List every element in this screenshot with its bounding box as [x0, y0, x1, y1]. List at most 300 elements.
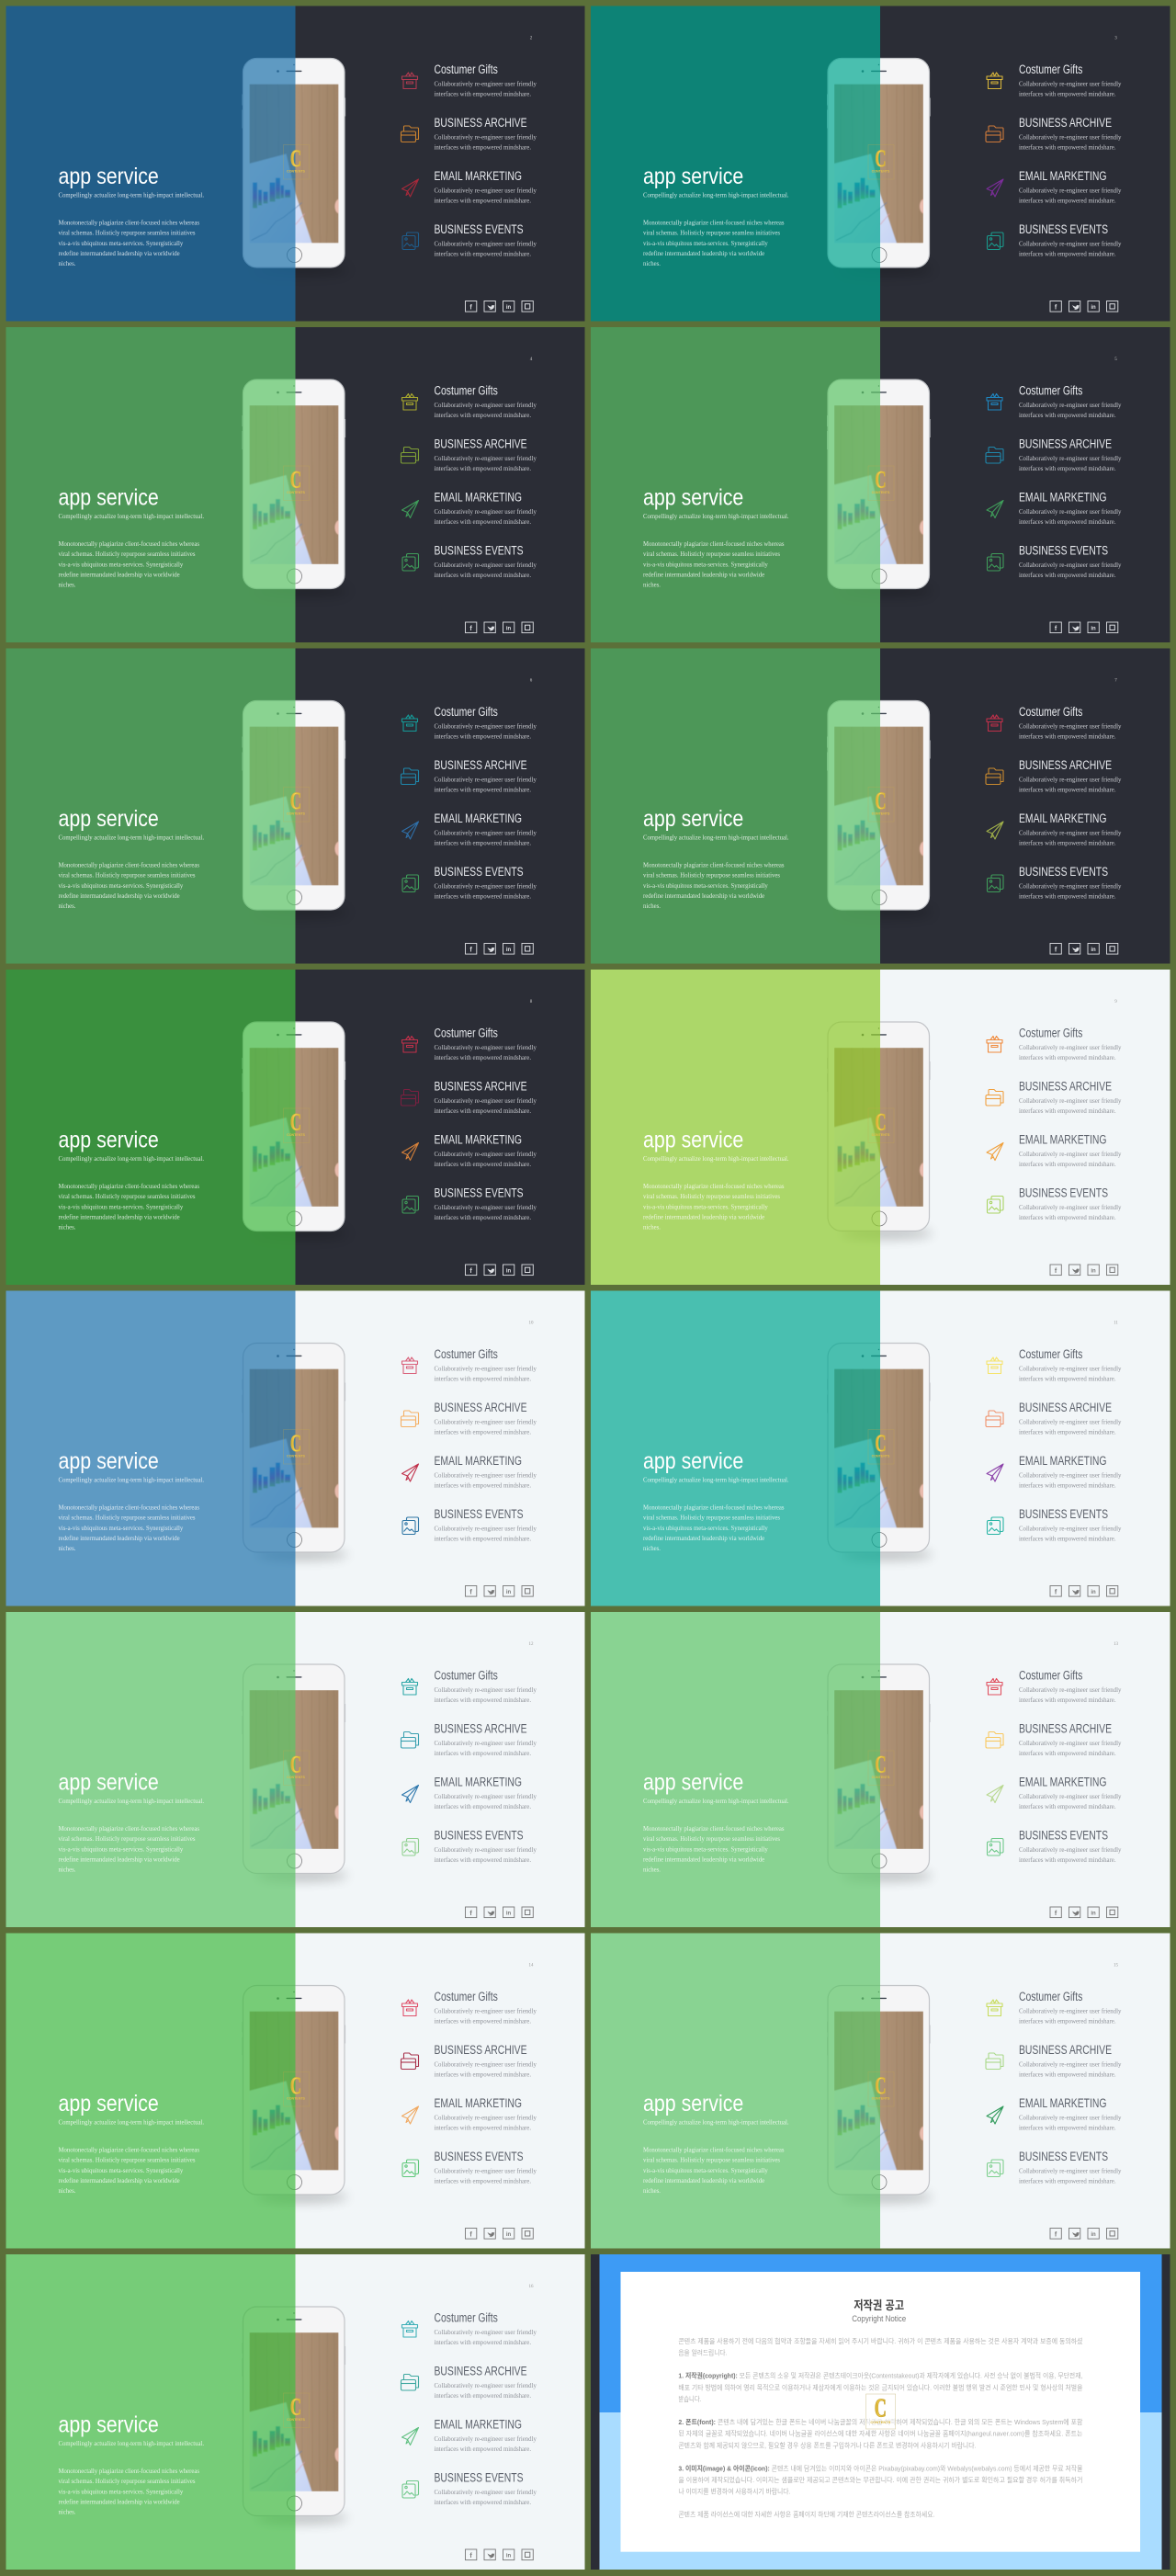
paragraph: niches. — [643, 1545, 661, 1552]
paragraph: redefine intermandated leadership via worldwide — [58, 571, 180, 579]
panel: slide 8 — [6, 970, 584, 1285]
feature: gifts: Costumer Gifts — [1019, 383, 1082, 398]
logo — [283, 466, 309, 500]
page number: 12 — [529, 1642, 534, 1647]
feature: events: BUSINESS EVENTS — [1019, 1828, 1108, 1843]
page number: 3 — [1114, 37, 1117, 40]
phone mockup — [827, 380, 933, 596]
paragraph: vis-a-vis ubiquitous meta-services. Synergistically — [58, 2488, 184, 2495]
logo — [283, 1429, 309, 1464]
feature: archive — [986, 2043, 1122, 2079]
feature: gifts: Collaboratively re-engineer user friendly — [435, 1044, 537, 1051]
blue band top — [599, 2254, 1161, 2412]
feature: email: Collaboratively re-engineer user friendly — [435, 508, 537, 516]
feature: events — [987, 1507, 1122, 1543]
feature: gifts: Costumer Gifts — [1019, 705, 1082, 719]
feature: archive: Collaboratively re-engineer user friendly — [435, 133, 537, 142]
feature: archive: interfaces with empowered mindshare. — [1019, 2071, 1116, 2079]
feature: email: Collaboratively re-engineer user friendly — [435, 187, 537, 195]
feature: gifts: Collaboratively re-engineer user friendly — [1019, 402, 1122, 409]
panel: slide 11 — [591, 1290, 1170, 1606]
phone mockup — [827, 700, 933, 917]
paragraph: vis-a-vis ubiquitous meta-services. Synergistically — [58, 2166, 184, 2174]
heading: app service — [643, 1447, 743, 1473]
paragraph: niches. — [58, 1866, 76, 1874]
subtitle: Compellingly actualize long-term high-impact intellectual. — [643, 1155, 789, 1163]
feature: gifts: interfaces with empowered mindshare. — [1019, 1697, 1116, 1704]
paragraph — [59, 1183, 199, 1231]
feature: email: interfaces with empowered mindshare. — [1019, 1161, 1116, 1168]
heading: app service — [58, 163, 159, 188]
feature: email: interfaces with empowered mindshare. — [1019, 518, 1116, 526]
feature: email: interfaces with empowered mindshare. — [1019, 197, 1116, 205]
feature: events: Collaboratively re-engineer user friendly — [435, 1525, 537, 1533]
social icons — [465, 1586, 533, 1596]
feature: archive — [401, 758, 537, 794]
colour overlay — [591, 1612, 880, 1927]
heading: app service — [58, 1769, 159, 1795]
feature: gifts: interfaces with empowered mindshare. — [435, 1375, 531, 1383]
colour overlay — [6, 649, 296, 963]
feature: archive — [986, 758, 1122, 794]
feature: gifts — [402, 62, 537, 98]
paragraph: redefine intermandated leadership via worldwide — [643, 1535, 764, 1542]
feature: archive: BUSINESS ARCHIVE — [1019, 1721, 1112, 1736]
feature: archive — [986, 116, 1122, 152]
feature: gifts: Collaboratively re-engineer user friendly — [435, 2007, 537, 2015]
feature: archive: BUSINESS ARCHIVE — [435, 758, 527, 772]
feature: events — [402, 2150, 537, 2185]
paragraph — [643, 861, 785, 910]
feature: events: Collaboratively re-engineer user friendly — [435, 2167, 537, 2175]
heading: app service — [58, 1127, 159, 1152]
feature: email — [402, 490, 537, 526]
paragraph: niches. — [58, 1545, 76, 1552]
page number: 13 — [1114, 1642, 1119, 1647]
feature: email — [987, 1132, 1122, 1168]
feature: events: interfaces with empowered mindshare. — [435, 1856, 531, 1864]
feature: events: interfaces with empowered mindshare. — [1019, 2177, 1116, 2185]
feature: email: Collaboratively re-engineer user friendly — [1019, 1793, 1122, 1800]
paragraph — [59, 1504, 199, 1552]
logo — [283, 787, 309, 822]
feature: gifts: Collaboratively re-engineer user friendly — [1019, 1686, 1122, 1694]
feature: email: Collaboratively re-engineer user friendly — [435, 1793, 537, 1800]
feature: events — [987, 543, 1122, 579]
colour overlay — [6, 970, 296, 1285]
light blue band bottom — [599, 2412, 1161, 2570]
paragraph — [643, 2146, 785, 2195]
feature: gifts — [402, 1668, 537, 1704]
subtitle: Compellingly actualize long-term high-impact intellectual. — [58, 2440, 204, 2447]
feature: archive — [986, 1721, 1122, 1757]
paragraph: vis-a-vis ubiquitous meta-services. Synergistically — [58, 239, 184, 247]
feature: email — [402, 1454, 537, 1490]
panel: slide 5 — [591, 327, 1170, 642]
paragraph: Monotonectally plagiarize client-focused niches whereas — [58, 1504, 199, 1512]
paragraph: niches. — [643, 2187, 661, 2195]
notice title: 저작권 공고 — [854, 2298, 904, 2312]
feature: gifts — [402, 1347, 537, 1383]
feature: gifts — [402, 1990, 537, 2026]
colour overlay — [591, 649, 880, 963]
feature: gifts: Costumer Gifts — [435, 62, 498, 76]
panel background — [591, 1934, 1170, 2248]
phone mockup — [243, 700, 347, 917]
panel: slide 13 — [591, 1612, 1170, 1927]
heading: app service — [58, 805, 159, 831]
logo — [868, 1429, 894, 1464]
feature: events: interfaces with empowered mindshare. — [1019, 1856, 1116, 1864]
feature: archive: Collaboratively re-engineer user friendly — [435, 1418, 537, 1426]
paragraph: redefine intermandated leadership via worldwide — [58, 892, 180, 900]
feature: email: EMAIL MARKETING — [1019, 1775, 1106, 1789]
colour overlay — [6, 1290, 296, 1606]
page number: 7 — [1114, 678, 1117, 684]
paragraph: Monotonectally plagiarize client-focused niches whereas — [58, 1183, 199, 1190]
feature: email: interfaces with empowered mindshare. — [435, 1161, 531, 1168]
logo — [283, 1108, 309, 1143]
page number: 16 — [529, 2285, 534, 2289]
feature: email: interfaces with empowered mindshare. — [435, 2445, 531, 2453]
feature: email — [987, 169, 1122, 205]
social icons — [465, 2549, 533, 2560]
feature: archive: Collaboratively re-engineer user friendly — [435, 2060, 537, 2069]
feature: archive: BUSINESS ARCHIVE — [1019, 116, 1112, 130]
feature: email — [402, 2096, 537, 2132]
feature: email: interfaces with empowered mindshare. — [1019, 839, 1116, 847]
clause 2: 된 자체의 글꼴로 제작되었습니다. 네이버 나눔글꼴 라이선스에 대한 자세한 사항은 네이버 나눔글꼴 홈페이지(hangeul.naver.com)를 참조하세요. 폰트는 — [678, 2429, 1082, 2438]
subtitle: Compellingly actualize long-term high-impact intellectual. — [58, 1798, 204, 1805]
feature: email: EMAIL MARKETING — [435, 169, 522, 183]
feature: archive — [401, 437, 537, 472]
paragraph: vis-a-vis ubiquitous meta-services. Synergistically — [58, 881, 184, 890]
feature: gifts: Costumer Gifts — [1019, 1347, 1082, 1361]
feature: events: BUSINESS EVENTS — [435, 543, 524, 558]
colour overlay — [6, 327, 296, 642]
feature: events: Collaboratively re-engineer user friendly — [435, 240, 537, 248]
feature: events: Collaboratively re-engineer user friendly — [435, 562, 537, 569]
paragraph: redefine intermandated leadership via worldwide — [58, 2177, 180, 2184]
feature: archive: interfaces with empowered mindshare. — [1019, 465, 1116, 472]
subtitle: Compellingly actualize long-term high-impact intellectual. — [643, 1476, 789, 1484]
feature: email: interfaces with empowered mindshare. — [435, 1481, 531, 1490]
feature: archive: Collaboratively re-engineer user friendly — [1019, 1097, 1122, 1105]
logo — [283, 2393, 309, 2428]
feature: gifts: Costumer Gifts — [435, 1347, 498, 1361]
paragraph: niches. — [58, 581, 76, 589]
panel background — [6, 1934, 584, 2248]
paragraph: Monotonectally plagiarize client-focused niches whereas — [643, 540, 785, 548]
feature: gifts: Collaboratively re-engineer user friendly — [435, 1686, 537, 1694]
feature: events: Collaboratively re-engineer user friendly — [1019, 882, 1122, 891]
feature: archive: Collaboratively re-engineer user friendly — [435, 2382, 537, 2389]
feature: email — [402, 169, 537, 205]
feature: events: BUSINESS EVENTS — [435, 1828, 524, 1843]
paragraph: viral schemas. Holisticly repurpose seamless initiatives — [58, 229, 196, 237]
heading: app service — [58, 2090, 159, 2116]
subtitle: Compellingly actualize long-term high-impact intellectual. — [643, 191, 789, 199]
paragraph — [59, 219, 199, 267]
feature: gifts: Costumer Gifts — [435, 2310, 498, 2325]
panel: slide 4 — [6, 327, 584, 642]
paragraph: niches. — [643, 902, 661, 910]
feature: gifts: interfaces with empowered mindshare. — [1019, 1054, 1116, 1061]
paragraph: vis-a-vis ubiquitous meta-services. Synergistically — [643, 239, 768, 247]
subtitle: Compellingly actualize long-term high-impact intellectual. — [643, 2118, 789, 2127]
feature: email — [987, 811, 1122, 847]
feature: events: Collaboratively re-engineer user friendly — [435, 1204, 537, 1211]
logo — [868, 466, 894, 500]
panel background — [6, 970, 584, 1285]
paragraph: vis-a-vis ubiquitous meta-services. Synergistically — [643, 1203, 768, 1210]
paragraph: Monotonectally plagiarize client-focused niches whereas — [58, 1825, 199, 1833]
feature: archive: BUSINESS ARCHIVE — [435, 1721, 527, 1736]
panel: slide 12 — [6, 1612, 584, 1927]
feature: email: Collaboratively re-engineer user friendly — [435, 829, 537, 837]
logo — [283, 1751, 309, 1785]
feature: gifts: Costumer Gifts — [435, 1990, 498, 2003]
feature: gifts: Collaboratively re-engineer user friendly — [435, 80, 537, 88]
colour overlay — [591, 6, 880, 322]
feature: events: BUSINESS EVENTS — [1019, 543, 1108, 558]
feature: gifts — [402, 705, 537, 741]
paragraph — [59, 861, 199, 910]
feature: events — [402, 222, 537, 258]
feature: archive: interfaces with empowered mindshare. — [435, 465, 531, 472]
logo watermark: CONTENTS — [870, 2420, 891, 2424]
paragraph: viral schemas. Holisticly repurpose seamless initiatives — [58, 2478, 196, 2485]
paragraph: redefine intermandated leadership via worldwide — [643, 2177, 764, 2184]
panel: slide 14 — [6, 1934, 584, 2248]
feature: archive: interfaces with empowered mindshare. — [435, 786, 531, 794]
colour overlay — [591, 1290, 880, 1606]
paragraph: redefine intermandated leadership via worldwide — [58, 1855, 180, 1864]
feature: archive: Collaboratively re-engineer user friendly — [435, 1740, 537, 1747]
feature: events: BUSINESS EVENTS — [1019, 865, 1108, 879]
heading: app service — [643, 2090, 743, 2116]
paragraph — [643, 1183, 785, 1231]
panel: slide 9 — [591, 970, 1170, 1285]
feature: events: BUSINESS EVENTS — [435, 1507, 524, 1521]
feature: email: EMAIL MARKETING — [1019, 1454, 1106, 1468]
panel: slide 3 — [591, 6, 1170, 322]
feature: gifts: interfaces with empowered mindshare. — [435, 732, 531, 741]
feature: email — [402, 1132, 537, 1168]
paragraph: Monotonectally plagiarize client-focused niches whereas — [58, 2146, 199, 2154]
feature: gifts: Collaboratively re-engineer user friendly — [435, 2329, 537, 2336]
paragraph: redefine intermandated leadership via worldwide — [643, 571, 764, 579]
logo watermark — [865, 2394, 896, 2429]
logo — [868, 1108, 894, 1143]
feature: gifts: Costumer Gifts — [1019, 1668, 1082, 1683]
feature: events: interfaces with empowered mindshare. — [435, 1535, 531, 1543]
feature: email: Collaboratively re-engineer user friendly — [435, 1151, 537, 1158]
feature: gifts: Collaboratively re-engineer user friendly — [1019, 1044, 1122, 1051]
feature: gifts: interfaces with empowered mindshare. — [1019, 1375, 1116, 1383]
clause 1: 배포 기타 방법에 의하여 영리 목적으로 이용하거나 제삼자에게 이용하는 것은 금지되어 있습니다. 이러한 불법 행위 발견 시 준엄한 민사 및 형사상의 처벌을 — [678, 2382, 1082, 2391]
feature: archive: interfaces with empowered mindshare. — [1019, 143, 1116, 152]
feature: email: Collaboratively re-engineer user friendly — [435, 2114, 537, 2122]
feature: archive: Collaboratively re-engineer user friendly — [435, 1097, 537, 1105]
paragraph: viral schemas. Holisticly repurpose seamless initiatives — [643, 550, 780, 558]
paragraph: viral schemas. Holisticly repurpose seamless initiatives — [643, 1193, 780, 1200]
feature: events: interfaces with empowered mindshare. — [1019, 250, 1116, 258]
colour overlay — [6, 1612, 296, 1927]
feature: email: interfaces with empowered mindshare. — [1019, 1481, 1116, 1490]
feature: gifts — [402, 1026, 537, 1061]
feature: events: BUSINESS EVENTS — [1019, 1186, 1108, 1200]
panel background — [591, 649, 1170, 963]
feature: archive: BUSINESS ARCHIVE — [435, 2364, 527, 2378]
social icons — [1050, 622, 1118, 633]
feature: gifts: Collaboratively re-engineer user friendly — [1019, 2007, 1122, 2015]
phone mockup — [243, 2307, 347, 2524]
page number: 11 — [1114, 1322, 1118, 1325]
paragraph: vis-a-vis ubiquitous meta-services. Synergistically — [643, 881, 768, 890]
feature: events: Collaboratively re-engineer user friendly — [1019, 1204, 1122, 1211]
paragraph: viral schemas. Holisticly repurpose seamless initiatives — [58, 550, 196, 558]
subtitle: Compellingly actualize long-term high-impact intellectual. — [643, 834, 789, 842]
feature: gifts: Costumer Gifts — [435, 383, 498, 398]
feature: events: Collaboratively re-engineer user friendly — [1019, 1525, 1122, 1533]
feature: archive: interfaces with empowered mindshare. — [435, 1107, 531, 1115]
paragraph: Monotonectally plagiarize client-focused niches whereas — [643, 1183, 785, 1190]
paragraph: viral schemas. Holisticly repurpose seamless initiatives — [643, 871, 780, 879]
phone mockup — [827, 59, 933, 276]
feature: archive: Collaboratively re-engineer user friendly — [1019, 2060, 1122, 2069]
phone mockup — [827, 1022, 933, 1239]
feature: events — [402, 2470, 537, 2506]
heading: app service — [643, 163, 743, 188]
feature: gifts — [987, 1026, 1122, 1061]
feature: archive: Collaboratively re-engineer user friendly — [435, 776, 537, 784]
paragraph: niches. — [58, 902, 76, 910]
feature: gifts — [987, 1668, 1122, 1704]
paragraph: Monotonectally plagiarize client-focused niches whereas — [58, 2468, 199, 2475]
feature: events: interfaces with empowered mindshare. — [1019, 1535, 1116, 1543]
feature: archive: Collaboratively re-engineer user friendly — [1019, 455, 1122, 462]
paragraph: viral schemas. Holisticly repurpose seamless initiatives — [643, 1835, 780, 1843]
paragraph: niches. — [643, 260, 661, 267]
feature: email: Collaboratively re-engineer user friendly — [1019, 1471, 1122, 1480]
social icons — [1050, 1265, 1118, 1276]
feature: events: BUSINESS EVENTS — [1019, 1507, 1108, 1521]
paragraph: redefine intermandated leadership via worldwide — [643, 250, 764, 257]
clause 3 — [678, 2463, 1082, 2495]
panel background — [6, 6, 584, 322]
closing line: 콘텐츠 제품 라이선스에 대한 자세한 사항은 홈페이지 하단에 기재한 콘텐츠라이선스를 참조하세요. — [678, 2510, 934, 2519]
feature: events: BUSINESS EVENTS — [435, 1186, 524, 1200]
colour overlay — [6, 2254, 296, 2570]
social icons — [1050, 943, 1118, 954]
subtitle: Compellingly actualize long-term high-impact intellectual. — [58, 2118, 204, 2127]
dark backing — [591, 2254, 1170, 2570]
phone mockup — [827, 1344, 933, 1560]
feature: gifts: interfaces with empowered mindshare. — [1019, 2017, 1116, 2026]
paragraph — [643, 1825, 785, 1874]
social icons — [1050, 301, 1118, 312]
notice subtitle: Copyright Notice — [852, 2314, 906, 2323]
feature: events — [987, 1828, 1122, 1864]
feature: events: interfaces with empowered mindshare. — [435, 2499, 531, 2506]
heading: app service — [58, 1447, 159, 1473]
feature: archive: BUSINESS ARCHIVE — [435, 437, 527, 451]
panel: slide 2 — [6, 6, 584, 322]
clause 1: 받습니다. — [678, 2394, 701, 2403]
paragraph: vis-a-vis ubiquitous meta-services. Synergistically — [58, 1524, 184, 1532]
paragraph — [643, 219, 785, 267]
phone mockup — [827, 1985, 933, 2202]
intro text: 음을 알려드립니다. — [678, 2348, 727, 2357]
paragraph: viral schemas. Holisticly repurpose seamless initiatives — [58, 1835, 196, 1843]
feature: email — [402, 811, 537, 847]
phone mockup — [243, 1664, 347, 1881]
paragraph: vis-a-vis ubiquitous meta-services. Synergistically — [643, 561, 768, 568]
feature: events: Collaboratively re-engineer user friendly — [435, 1846, 537, 1854]
social icons — [1050, 1907, 1118, 1918]
feature: events: BUSINESS EVENTS — [435, 865, 524, 879]
feature: events: Collaboratively re-engineer user friendly — [1019, 562, 1122, 569]
feature: archive: BUSINESS ARCHIVE — [1019, 2043, 1112, 2057]
clause 3: 나 이미지를 변경하여 사용하시기 바랍니다. — [678, 2486, 790, 2495]
feature: events: interfaces with empowered mindshare. — [1019, 572, 1116, 579]
feature: gifts: Costumer Gifts — [1019, 1026, 1082, 1040]
feature: gifts — [987, 1347, 1122, 1383]
feature: archive — [986, 437, 1122, 472]
colour overlay — [591, 1934, 880, 2248]
feature: events: Collaboratively re-engineer user friendly — [435, 882, 537, 891]
feature: gifts: Costumer Gifts — [435, 705, 498, 719]
panel: copyright notice — [591, 2254, 1170, 2570]
feature: email: Collaboratively re-engineer user friendly — [435, 1471, 537, 1480]
social icons — [465, 2228, 533, 2239]
feature: email — [987, 1775, 1122, 1810]
feature: email — [987, 2096, 1122, 2132]
panel background — [591, 6, 1170, 322]
feature: gifts: Costumer Gifts — [1019, 1990, 1082, 2003]
feature: email: Collaboratively re-engineer user friendly — [1019, 829, 1122, 837]
panel background — [591, 1290, 1170, 1606]
feature: email: EMAIL MARKETING — [1019, 169, 1106, 183]
feature: email: EMAIL MARKETING — [1019, 811, 1106, 825]
panel background — [6, 1612, 584, 1927]
paragraph: redefine intermandated leadership via worldwide — [58, 1213, 180, 1221]
feature: events: interfaces with empowered mindshare. — [435, 1214, 531, 1221]
feature: gifts — [402, 383, 537, 419]
feature: archive: interfaces with empowered mindshare. — [1019, 1750, 1116, 1757]
colour overlay — [591, 327, 880, 642]
feature: events — [987, 222, 1122, 258]
feature: email: EMAIL MARKETING — [435, 1132, 522, 1147]
page number: 10 — [529, 1322, 534, 1325]
clause 3: 을 이용하여 제작되었습니다. 이미지는 샘플로만 제공되고 콘텐츠와는 무관합니다. 이에 관한 권리는 귀하가 별도로 확인하고 필요할 경우 허가를 취득하거 — [678, 2475, 1082, 2484]
feature: gifts — [987, 705, 1122, 741]
logo — [283, 2071, 309, 2106]
paragraph: Monotonectally plagiarize client-focused niches whereas — [643, 1504, 785, 1512]
feature: events: interfaces with empowered mindshare. — [435, 250, 531, 258]
feature: archive: Collaboratively re-engineer user friendly — [1019, 776, 1122, 784]
feature: archive: BUSINESS ARCHIVE — [435, 116, 527, 130]
feature: email: EMAIL MARKETING — [435, 2096, 522, 2110]
subtitle: Compellingly actualize long-term high-impact intellectual. — [643, 1798, 789, 1805]
feature: archive: BUSINESS ARCHIVE — [1019, 1079, 1112, 1094]
paragraph: redefine intermandated leadership via worldwide — [643, 892, 764, 900]
subtitle: Compellingly actualize long-term high-impact intellectual. — [58, 1155, 204, 1163]
paragraph: niches. — [643, 1866, 661, 1874]
feature: archive: interfaces with empowered mindshare. — [435, 143, 531, 152]
logo watermark: C — [875, 2395, 887, 2423]
